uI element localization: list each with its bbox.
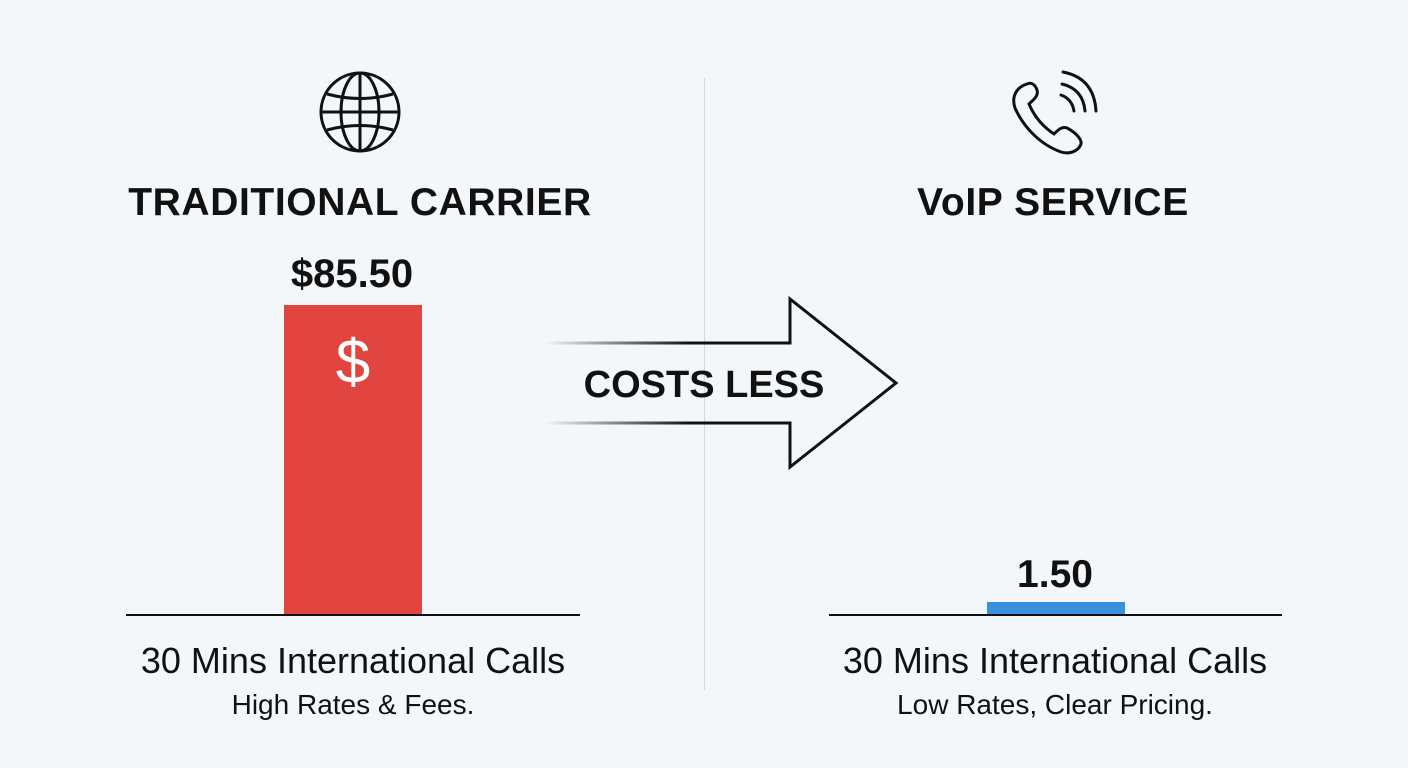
icon: dollar: $ <box>336 328 370 397</box>
label left: 30 Mins International Calls <box>141 640 565 681</box>
heading: voip service: VoIP SERVICE <box>917 181 1189 224</box>
bar: voip <box>987 602 1125 615</box>
baseline left <box>126 614 580 616</box>
label right: 30 Mins International Calls <box>843 640 1267 681</box>
sublabel left: High Rates & Fees. <box>232 689 474 720</box>
value: $85.50: $85.50 <box>291 252 413 296</box>
arrow label: COSTS LESS <box>584 364 824 406</box>
icon: phone <box>1012 70 1098 154</box>
arrow: costs less <box>550 296 898 470</box>
value: 1.50: 1.50 <box>1017 553 1093 596</box>
divider <box>704 78 705 690</box>
icon: globe <box>320 72 400 152</box>
baseline right <box>829 614 1282 616</box>
bar: traditional <box>284 305 422 615</box>
heading: traditional carrier: TRADITIONAL CARRIER <box>128 181 592 224</box>
sublabel right: Low Rates, Clear Pricing. <box>897 689 1213 720</box>
